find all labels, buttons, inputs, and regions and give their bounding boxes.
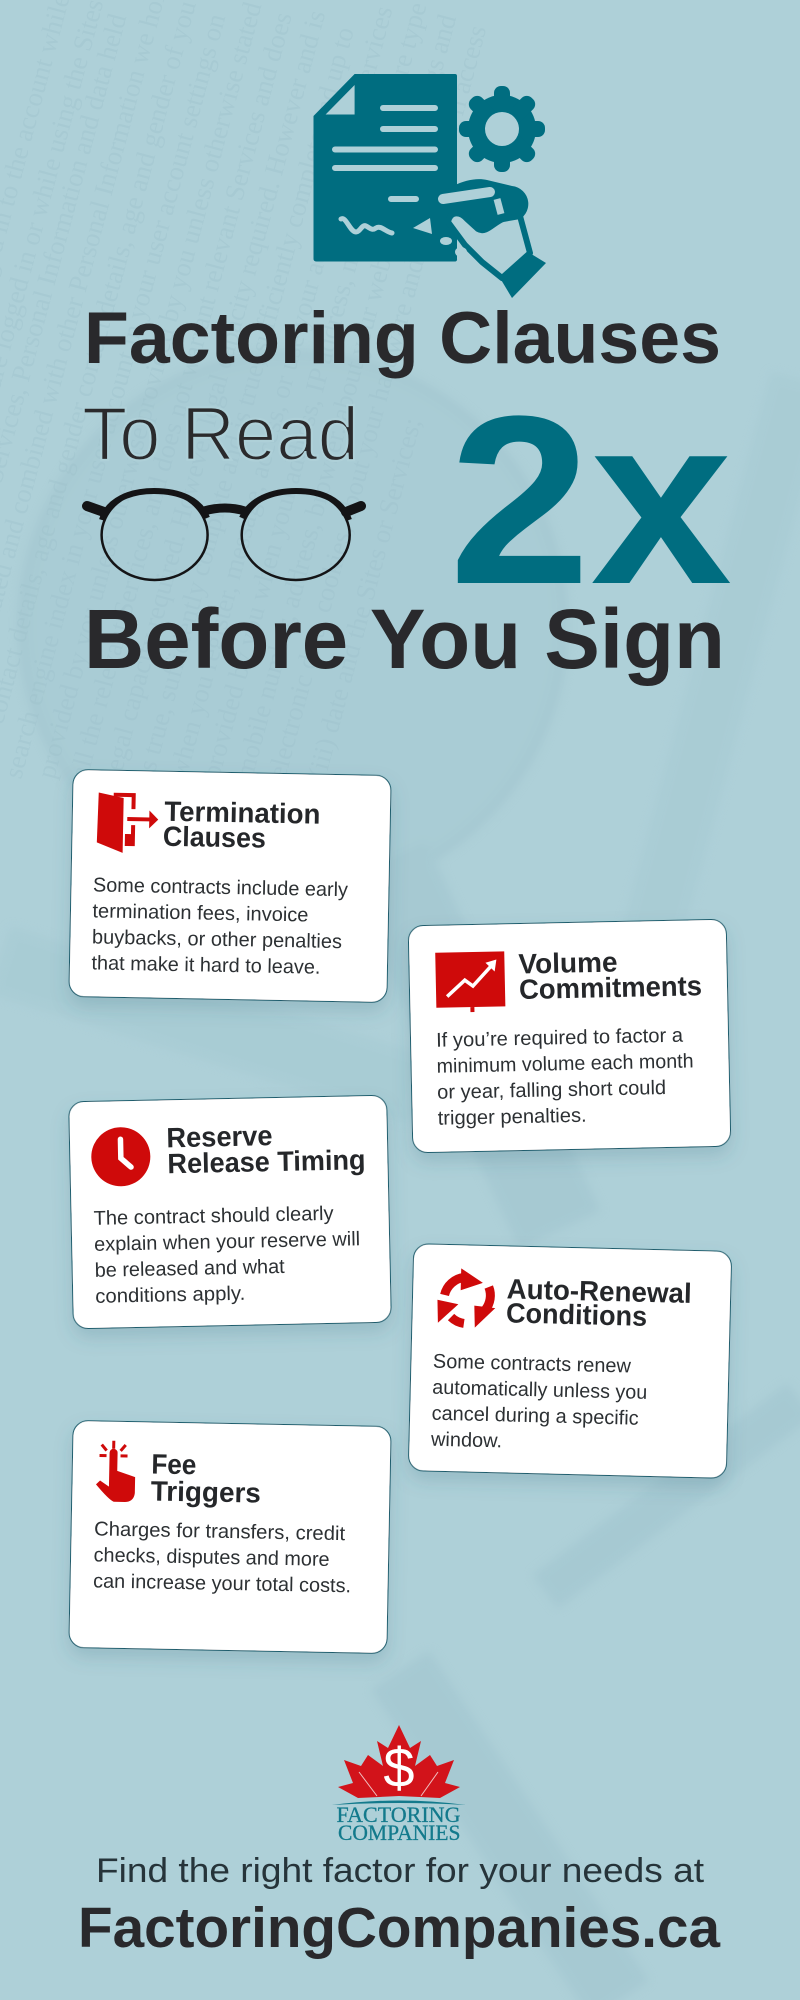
body text: [91, 874, 348, 979]
background faint contract text: mobile number, address, browser, about your web beacons/pixel tags and: [229, 11, 462, 782]
body text: be released and what: [94, 1256, 285, 1282]
panel: auto-renewal conditions: [408, 1244, 732, 1478]
body text: window.: [430, 1429, 502, 1452]
body text: minimum volume each month: [436, 1050, 694, 1078]
icon: hand with pen: [413, 179, 546, 298]
body text: [436, 1024, 695, 1130]
body text: [93, 1202, 361, 1308]
logo: Factoring Companies maple leaf: $: [383, 1736, 415, 1799]
body text: [430, 1351, 648, 1456]
body text: [93, 1518, 352, 1597]
body text: Some contracts include early: [93, 874, 348, 901]
body text: cancel during a specific: [431, 1403, 639, 1430]
background faint contract text: all the relevant Services, and does not warrant relevant Services and does: [64, 9, 298, 782]
body text: The contract should clearly: [93, 1203, 334, 1230]
panel: fee triggers: Triggers: [151, 1475, 261, 1509]
background faint contract text: electronic data, cookies, about your hardware and software, wi-fi access: [262, 22, 492, 782]
body text: can increase your total costs.: [93, 1570, 351, 1597]
subtitle: To Read: To Read: [82, 392, 359, 477]
title line 1: Factoring Clauses: [84, 298, 721, 379]
body text: automatically unless you: [432, 1377, 648, 1404]
background faint contract text: legal capacity required. However legal capacity required. However and is: [97, 7, 331, 782]
body text: buybacks, or other penalties: [92, 926, 342, 953]
background faint contract text: when you register, message, access, or use your account with the Services: [163, 3, 398, 782]
website address: FactoringCompanies.ca: [78, 1896, 721, 1960]
body text: conditions apply.: [95, 1283, 245, 1308]
icon: chart arrow: [435, 951, 505, 1013]
big number 2x: 2x: [449, 366, 732, 634]
icon: pointing finger: [96, 1440, 136, 1502]
icon: door with arrow: [97, 792, 159, 854]
heading: Termination: [164, 796, 321, 830]
icon: renew arrows: [437, 1268, 496, 1328]
body text: that make it hard to leave.: [91, 952, 321, 979]
body text: Charges for transfers, credit: [94, 1518, 346, 1545]
background faint contract text: [0, 0, 492, 782]
heading: Volume: [518, 946, 618, 980]
background faint contract text: provided by you when your address, IP address, network or hardware type: [196, 0, 432, 782]
heading: Auto-Renewal: [506, 1273, 692, 1309]
panel: termination clauses: Clauses: [163, 821, 266, 854]
icon: clock: [91, 1127, 151, 1187]
body text: checks, disputes and more: [93, 1544, 330, 1571]
background faint contract text: is true, sufficiently complete and is true, sufficiently complete and up to: [130, 24, 360, 782]
body text: If you’re required to factor a: [436, 1025, 684, 1052]
illustration: document signing and gear: [314, 74, 546, 298]
body text: explain when your reserve will: [94, 1228, 360, 1256]
heading: Fee: [151, 1448, 197, 1480]
background faint contract text: search engine index in your user account in your user account settings on: [0, 10, 231, 782]
body text: termination fees, invoice: [92, 900, 309, 927]
panel: reserve release timing: [69, 1095, 391, 1329]
logo: Factoring Companies maple leaf: COMPANIES: [338, 1820, 460, 1845]
panel: volume commitments: [408, 919, 731, 1153]
background faint contract text: provided by you unless otherwise provided by you unless otherwise stated: [31, 0, 268, 782]
call to action line: Find the right factor for your needs at: [96, 1852, 705, 1890]
panel: fee triggers: [69, 1420, 391, 1654]
panel: termination clauses: [69, 769, 391, 1003]
title line 2: Before You Sign: [84, 592, 725, 686]
icon: gear: [459, 86, 545, 172]
icon: document: [314, 74, 457, 262]
icon: glasses: [87, 490, 361, 580]
body text: or year, falling short could: [437, 1077, 666, 1104]
logo: Factoring Companies maple leaf: FACTORING: [336, 1802, 461, 1827]
panel: reserve release timing: Release Timing: [167, 1144, 366, 1179]
body text: Some contracts renew: [433, 1351, 632, 1377]
body text: trigger penalties.: [437, 1105, 587, 1130]
panel: volume commitments: Commitments: [519, 970, 702, 1005]
panel: auto-renewal conditions: Conditions: [506, 1297, 647, 1332]
background faint contract text: (iii) date and the Sites or Services;: [302, 415, 427, 782]
heading: Reserve: [166, 1120, 273, 1153]
logo: Factoring Companies maple leaf: [332, 1725, 466, 1845]
